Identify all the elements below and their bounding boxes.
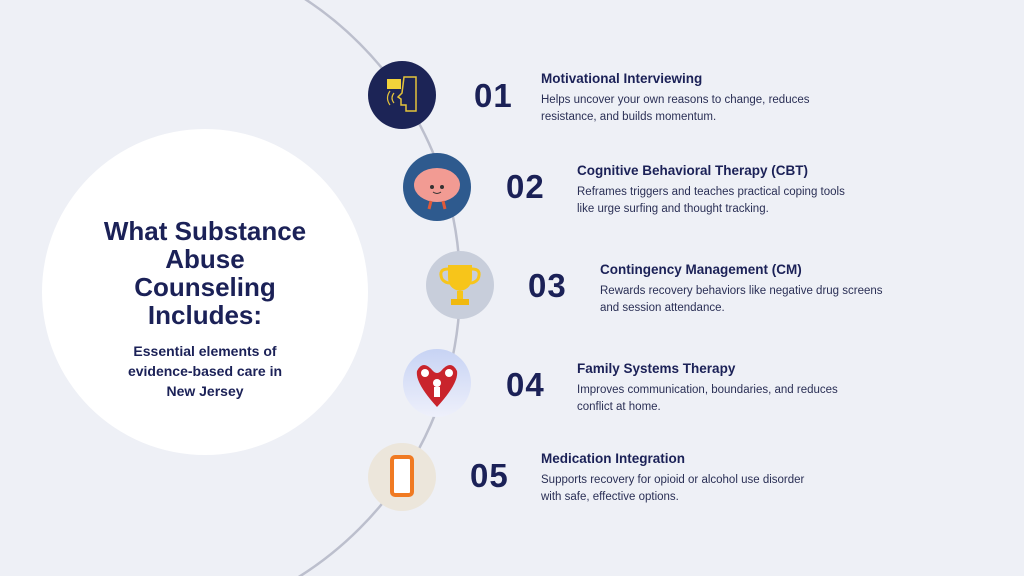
item 04 <box>577 361 838 413</box>
item 05 <box>541 451 804 503</box>
item 02: Reframes triggers and teaches practical coping tools <box>577 186 845 198</box>
item 04: Improves communication, boundaries, and reduces <box>577 384 838 396</box>
title: Abuse <box>165 244 245 274</box>
item 03 <box>600 262 883 314</box>
item 04: Family Systems Therapy <box>577 361 735 376</box>
item 05: Supports recovery for opioid or alcohol use disorder <box>541 474 804 486</box>
title: What Substance <box>104 216 306 246</box>
item 03: Rewards recovery behaviors like negative drug screens <box>600 285 883 297</box>
item 02 <box>577 163 845 215</box>
icon: trophy <box>426 251 494 319</box>
item 04: conflict at home. <box>577 401 661 413</box>
subtitle: New Jersey <box>166 383 244 399</box>
item 01: Helps uncover your own reasons to change, reduces <box>541 94 810 106</box>
title <box>104 216 306 330</box>
number 01: 01 <box>474 77 513 114</box>
icon: speaking head <box>368 61 436 129</box>
subtitle <box>128 343 282 399</box>
title: Includes: <box>148 300 262 330</box>
item 01: resistance, and builds momentum. <box>541 111 716 123</box>
number 02: 02 <box>506 168 545 205</box>
number 05: 05 <box>470 457 509 494</box>
item 03: Contingency Management (CM) <box>600 262 802 277</box>
icon: brain <box>403 153 471 221</box>
panel: title circle <box>42 129 368 455</box>
subtitle: Essential elements of <box>133 343 277 359</box>
item 05: Medication Integration <box>541 451 685 466</box>
item 02: like urge surfing and thought tracking. <box>577 203 769 215</box>
icon: family <box>403 349 471 417</box>
subtitle: evidence-based care in <box>128 363 282 379</box>
item 01: Motivational Interviewing <box>541 71 702 86</box>
number 03: 03 <box>528 267 567 304</box>
item 05: with safe, effective options. <box>541 491 679 503</box>
title: Counseling <box>134 272 276 302</box>
item 02: Cognitive Behavioral Therapy (CBT) <box>577 163 808 178</box>
item 01 <box>541 71 810 123</box>
number 04: 04 <box>506 366 545 403</box>
item 03: and session attendance. <box>600 302 725 314</box>
icon: phone <box>368 443 436 511</box>
